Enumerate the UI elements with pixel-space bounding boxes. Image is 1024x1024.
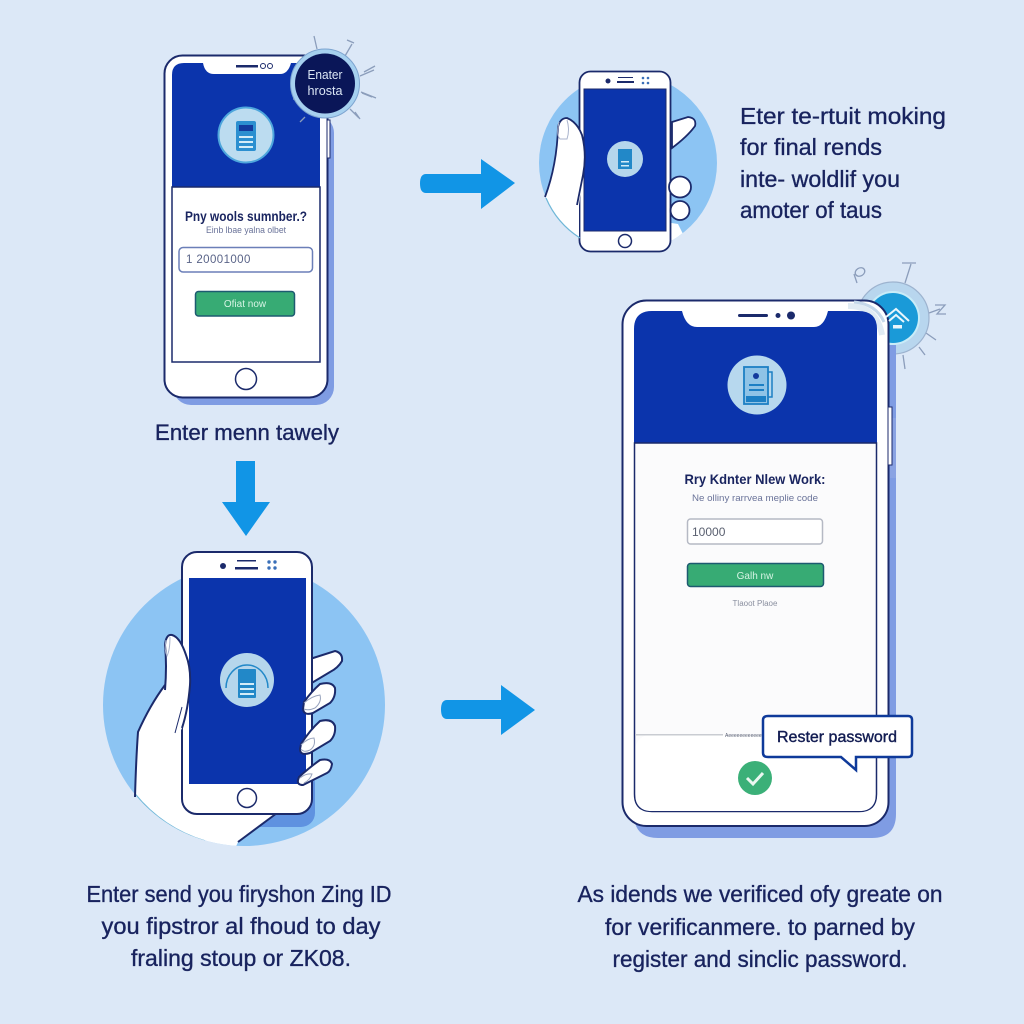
form heading: Pny wools sumnber.?	[185, 209, 307, 224]
text block: bottom right: As idends we verificed ofy greate on	[578, 881, 942, 907]
fingers over phone	[298, 683, 335, 785]
icon: check	[738, 761, 772, 795]
caption: phone 1: Enter menn tawely	[155, 420, 339, 445]
button: green: Galh nw	[737, 571, 774, 582]
arrow: right, bottom	[441, 685, 535, 735]
text block: bottom left: Enter send you firyshon Zing ID	[86, 881, 392, 907]
input field	[179, 248, 312, 272]
callout: rester password	[763, 716, 912, 770]
input field	[688, 519, 822, 544]
callout: rester password: Rester password	[777, 729, 897, 746]
text block: bottom right	[578, 881, 942, 972]
text block: top right: Eter te-rtuit moking	[740, 103, 946, 129]
input field: 10000	[692, 525, 726, 539]
icon: document badge	[218, 108, 274, 162]
thumb over phone	[160, 635, 190, 750]
arrow: right, top	[420, 159, 515, 209]
arrow: down	[222, 461, 270, 536]
icon: document badge	[607, 141, 643, 177]
form subheading: Ne olliny rarrvea meplie code	[692, 493, 818, 504]
icon: house chevrons	[886, 309, 909, 328]
badge: enter hrosta: hrosta	[308, 84, 343, 98]
thumb and fingers over phone	[544, 117, 692, 238]
text block: bottom right: for verificanmere. to parned by	[605, 914, 915, 940]
text block: bottom left: fraling stoup or ZK08.	[131, 945, 351, 971]
icon: document badge	[220, 653, 274, 707]
phone 1: payment form	[164, 56, 334, 405]
text block: bottom left	[86, 881, 392, 971]
button: green	[688, 564, 824, 586]
badge: enter hrosta: Enater	[308, 68, 342, 82]
text block: bottom right: register and sinclic password.	[612, 946, 908, 972]
text block: bottom left: you fipstror al fhoud to day	[102, 913, 381, 939]
input field: 1 20001000	[186, 254, 251, 266]
text block: top right	[740, 103, 946, 223]
form subheading: Einb lbae yalna olbet	[206, 225, 286, 235]
text block: top right: amoter of taus	[740, 197, 882, 223]
form heading: Rry Kdnter Nlew Work:	[684, 471, 826, 487]
step illustration: hand holding phone, top	[530, 72, 717, 260]
badge: enter hrosta	[290, 36, 376, 122]
finger: index behind phone	[310, 651, 342, 684]
button: green	[196, 292, 294, 316]
badge: home icon	[854, 263, 946, 369]
text block: top right: for final rends	[740, 134, 882, 160]
step illustration: hand holding phone, bottom	[103, 552, 385, 860]
divider with label: Aeeeeeeeeeeee	[725, 733, 762, 739]
icon: document badge	[728, 356, 786, 414]
divider with label	[635, 733, 762, 739]
button: green: Ofiat now	[224, 299, 267, 310]
text block: top right: inte- woldlif you	[740, 166, 900, 192]
small link text: Tlaoot Plaoe	[733, 599, 778, 608]
phone 4: new work form	[622, 300, 896, 838]
